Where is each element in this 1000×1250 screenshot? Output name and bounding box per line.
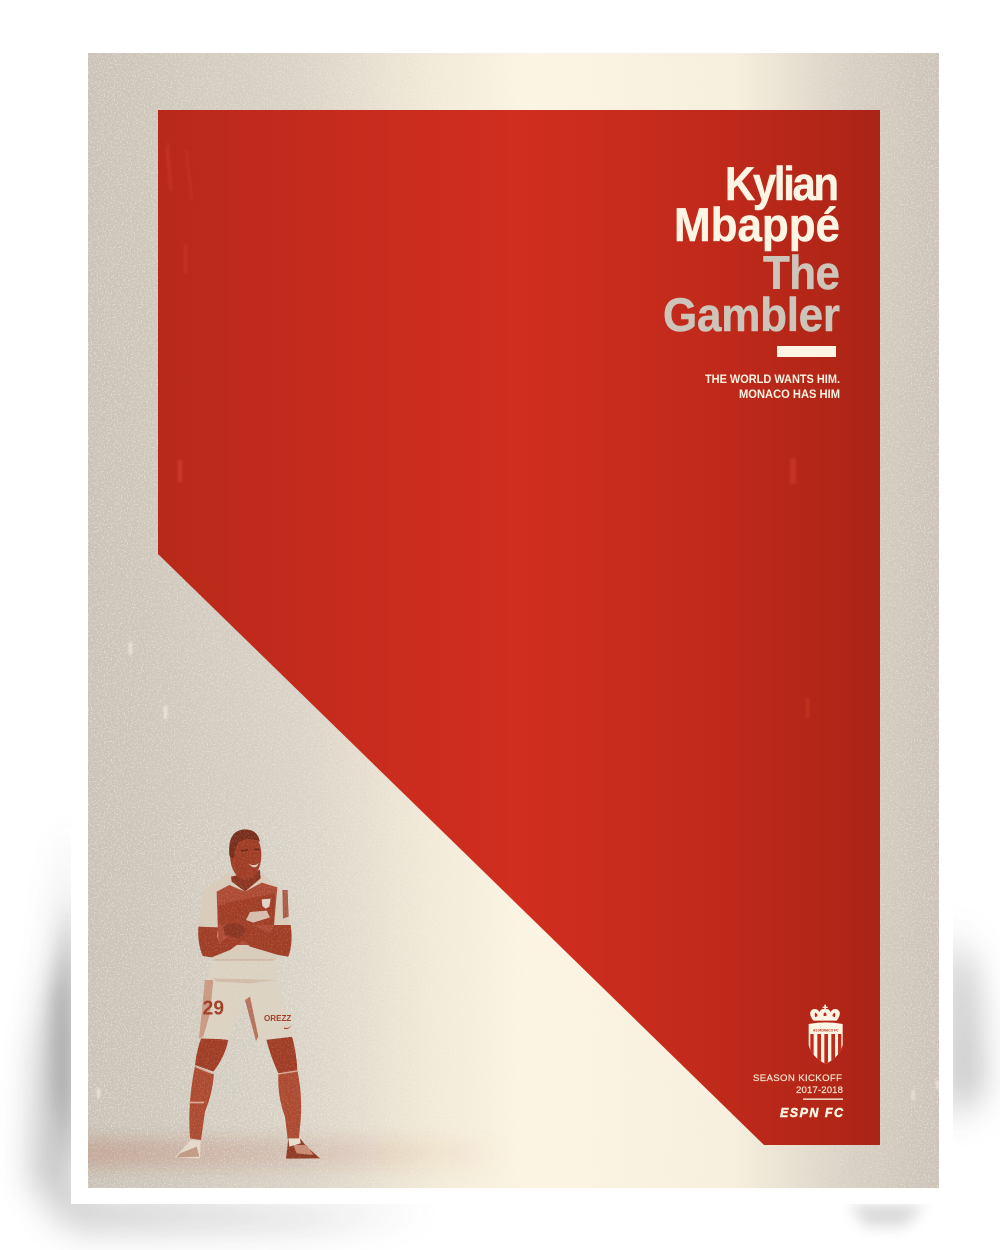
arms [198,918,292,957]
poster background [88,53,939,1188]
legs [195,1035,297,1073]
season rule [803,1098,843,1100]
shirt number: 29 [203,996,224,1019]
grain over player [170,820,330,1165]
divider bar [777,346,836,357]
subtitle: MONACO HAS HIM [739,389,840,401]
season text [753,1073,843,1096]
panel scuffs [166,140,809,718]
title: player name: Mbappé [674,198,840,251]
club crest [809,1005,843,1067]
title: nickname [663,246,840,341]
drop shadows under the sheet [34,820,980,1226]
crest and sponsor on shirt [262,899,271,909]
waist strip [214,959,274,961]
season text: 2017-2018 [796,1085,843,1096]
title: nickname: Gambler [663,288,840,341]
shield stripes [810,1034,841,1067]
title: player name: Kylian [725,158,839,211]
ESPN FC logo: ESPN FC [780,1106,844,1120]
red panel [158,110,880,1145]
title: player name [674,158,840,251]
season text: SEASON KICKOFF [753,1073,842,1084]
kit swoosh [284,1025,292,1029]
subtitle: THE WORLD WANTS HIM. [705,374,840,386]
shoes [175,1138,320,1159]
head [231,870,261,892]
shield [809,1022,843,1064]
title block [663,158,840,341]
shorts sponsor: OREZZ [264,1013,292,1023]
shield lettering: AS MONACO FC [813,1027,838,1032]
title: nickname: The [763,246,840,299]
shirt [198,873,291,960]
player figure [175,829,320,1159]
subtitle [705,374,840,401]
floor shadow [70,1138,518,1168]
specks on paper [97,642,939,1100]
socks [189,1066,301,1140]
shorts [199,960,293,1041]
crown [810,1005,840,1021]
